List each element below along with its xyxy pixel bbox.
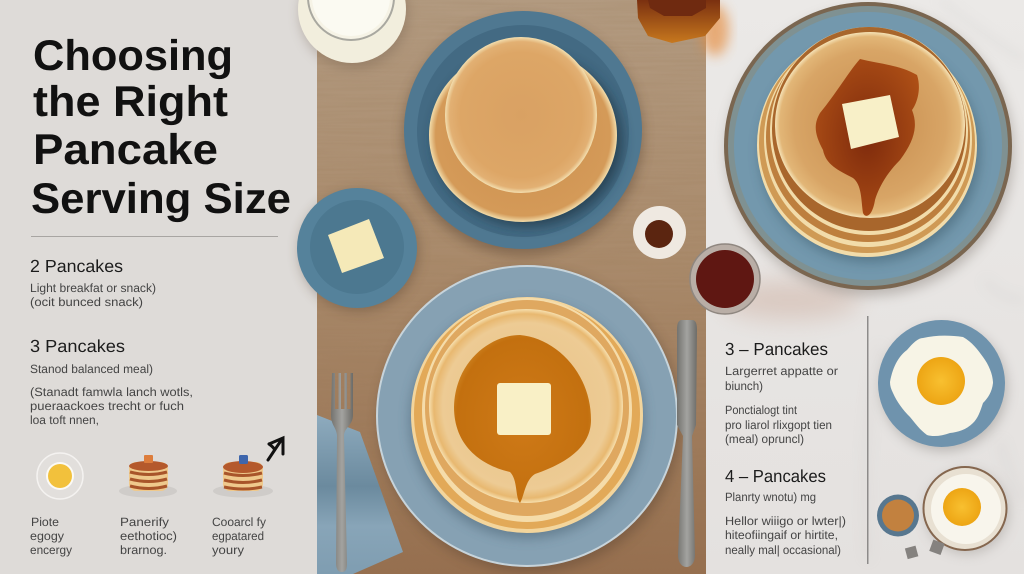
panel: wooden table <box>317 0 707 574</box>
text block: icon captions: Panerify <box>120 515 169 529</box>
text block: 3-pancakes right: (meal) opɾuncl) <box>725 432 804 446</box>
text block: 4-pancakes right <box>725 466 846 557</box>
text block: 3-pancakes right: pro liarol rlixgopt tien <box>725 418 832 432</box>
plate: two pancakes <box>403 11 643 255</box>
napkin <box>317 415 403 574</box>
text block: icon captions: youry <box>212 543 244 557</box>
text block: 3-pancakes right: Ponctialogt tint <box>725 403 798 417</box>
title: Serving Size <box>31 175 291 223</box>
text block: 3 pancakes: (Stanadt famwla lanch wotls, <box>30 385 193 399</box>
glass of syrup <box>690 244 760 314</box>
title <box>31 32 291 223</box>
butter pat <box>497 383 551 435</box>
text block: 4-pancakes right: Hellor wiiigo or lwter|) <box>725 514 846 528</box>
title: the Right <box>33 78 228 126</box>
icon: egg <box>37 453 83 499</box>
text block: 4-pancakes right: Planrty wnotu) mg <box>725 490 816 504</box>
text block: 4-pancakes right: 4 – Pancakes <box>725 466 826 486</box>
panel: left text background <box>0 0 317 574</box>
text block: icon captions: Piote <box>31 515 59 529</box>
text block: icon captions: eethotioc) <box>120 529 177 543</box>
fork <box>331 373 353 572</box>
text block: icon captions: egogy <box>30 529 64 543</box>
text block: 3 pancakes: Stanod balanced meal) <box>30 362 153 376</box>
text block: 3 pancakes <box>30 336 193 427</box>
small butter dish <box>297 188 419 311</box>
title: Choosing <box>33 32 233 80</box>
small sauce cup <box>877 494 919 536</box>
text block: icon captions: Cooarcl fy <box>212 515 266 529</box>
text block: icon captions: encergy <box>30 543 72 557</box>
text block: 3 pancakes: pueraackoes trecht or fuch <box>30 399 184 413</box>
egg plate <box>878 320 1007 451</box>
syrup jar <box>637 0 720 43</box>
text block: 3-pancakes right: 3 – Pancakes <box>725 339 828 359</box>
egg rice bowl <box>924 467 1009 554</box>
tea bag tags <box>905 540 945 559</box>
plate: four pancake stack <box>724 2 1014 296</box>
text block: 3-pancakes right <box>725 339 838 446</box>
text block: 3 pancakes: 3 Pancakes <box>30 336 125 356</box>
text block: icon captions: brarnog. <box>120 543 167 557</box>
text block: 3-pancakes right: biunch) <box>725 379 763 393</box>
icon: pancake stack with orange butter <box>119 455 177 498</box>
text block: 2 pancakes: 2 Pancakes <box>30 256 123 276</box>
text block: icon captions: egpatared <box>212 529 264 543</box>
text block: icon captions <box>30 515 266 557</box>
text block: 2 pancakes: Light breakfat or snack) <box>30 281 156 295</box>
arrow <box>268 438 283 460</box>
text block: 4-pancakes right: hiteofiingaif or hirtite, <box>725 528 838 542</box>
text block: 2 pancakes: (ocit bunced snack) <box>30 295 143 309</box>
text block: 3 pancakes: loa toft nnen, <box>30 413 99 427</box>
title: Pancake <box>33 126 218 174</box>
panel: marble surface <box>701 0 1024 574</box>
syrup ramekin <box>633 206 686 259</box>
text block: 4-pancakes right: neally mal| occasional) <box>725 543 841 557</box>
milk glass <box>298 0 408 68</box>
knife <box>677 320 697 567</box>
icon: pancake stack with blue butter <box>213 455 273 498</box>
text block: 3-pancakes right: Largerret appatte or <box>725 364 838 378</box>
plate: large pancake stack <box>376 265 681 572</box>
butter pat <box>842 95 899 149</box>
syrup pool <box>816 59 919 216</box>
text block: 2 pancakes <box>30 256 156 309</box>
syrup pool <box>454 335 591 503</box>
